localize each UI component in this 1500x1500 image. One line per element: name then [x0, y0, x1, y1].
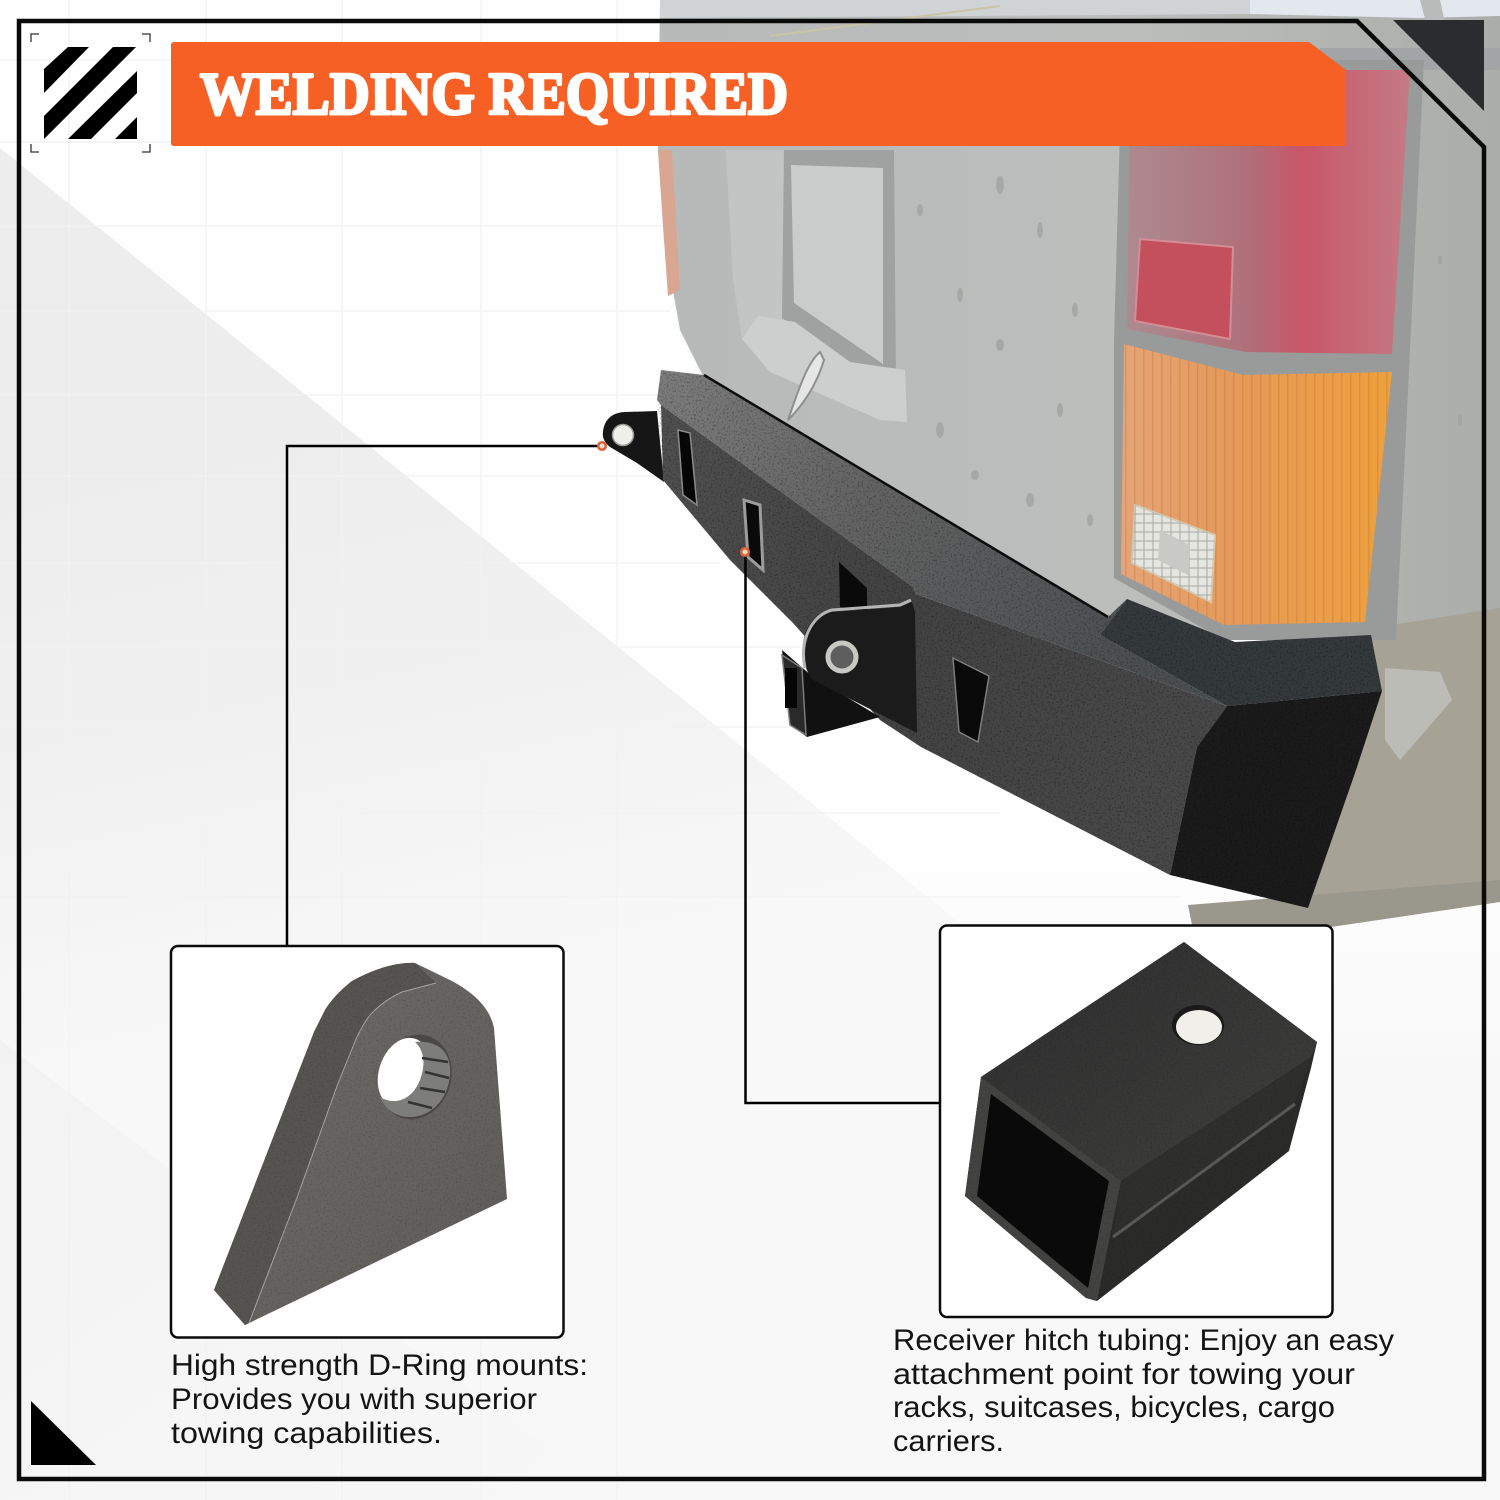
corner triangle: top right [1393, 20, 1484, 111]
tailgate gap line [704, 375, 1108, 617]
bumper front face [661, 405, 1227, 875]
marker dot: D-ring [598, 442, 606, 450]
wet spots [917, 176, 1462, 526]
taillight red inset [1135, 239, 1233, 339]
reflector cells [1132, 505, 1215, 602]
photo: jeep rear, faded [658, 0, 1500, 927]
caption: receiver: Receiver hitch tubing: Enjoy an easy [893, 1324, 1394, 1357]
bumper top surface [657, 370, 1227, 706]
left D-ring mount [603, 411, 664, 482]
receiver tube part [960, 935, 1325, 1305]
taillight red [1127, 70, 1410, 354]
tube texture [968, 975, 1305, 1298]
caption: D-ring: towing capabilities. [171, 1417, 442, 1450]
hole [367, 1025, 463, 1129]
caption: receiver: racks, suitcases, bicycles, cargo [893, 1391, 1335, 1424]
slot 3 [839, 562, 867, 612]
slot 2 [744, 500, 763, 570]
rear bumper [603, 360, 1390, 920]
bumper corner top [1100, 599, 1382, 706]
leader line: D-ring [287, 446, 602, 945]
part texture [216, 964, 506, 1323]
tube opening [977, 1094, 1109, 1288]
car body [658, 0, 1500, 640]
reverse light reflector [1132, 505, 1215, 602]
handle plate [742, 316, 907, 422]
caption: receiver [893, 1324, 1394, 1458]
caption: D-ring: High strength D-Ring mounts: [171, 1349, 588, 1382]
D-ring mount part [205, 955, 515, 1335]
amber ribs [1121, 344, 1392, 625]
taillight sliver left [658, 150, 680, 296]
license plate recess [782, 150, 896, 380]
corner triangle: bottom left [31, 1401, 96, 1465]
caption: receiver: carriers. [893, 1425, 1004, 1458]
panel: receiver tube [940, 926, 1332, 1317]
hole [1172, 1005, 1224, 1045]
icon: hazard stripes [31, 34, 150, 152]
title: WELDING REQUIRED [200, 61, 788, 127]
panel: D-ring mount [171, 946, 564, 1338]
reflector centre [1158, 530, 1190, 575]
hole cut marks [408, 1058, 449, 1108]
slot 1 [678, 430, 697, 505]
bumper corner side [1170, 691, 1382, 908]
taillight amber [1121, 344, 1392, 625]
lens surround [1114, 60, 1424, 640]
tailgate recess [726, 150, 790, 340]
title banner [171, 42, 1346, 146]
icon: door handle [788, 352, 824, 420]
slot 4 [953, 658, 989, 742]
caption: receiver: attachment point for towing your [893, 1358, 1355, 1391]
caption: D-ring [171, 1349, 588, 1450]
hitch receiver [782, 650, 880, 737]
part edge face [214, 963, 436, 1325]
marker dot: receiver [741, 548, 749, 556]
leader line: receiver [746, 552, 940, 1103]
lower body / mud [1290, 608, 1500, 908]
bumper texture [650, 360, 1390, 920]
caption: D-ring: Provides you with superior [171, 1383, 537, 1416]
right D-ring mount [803, 600, 917, 733]
